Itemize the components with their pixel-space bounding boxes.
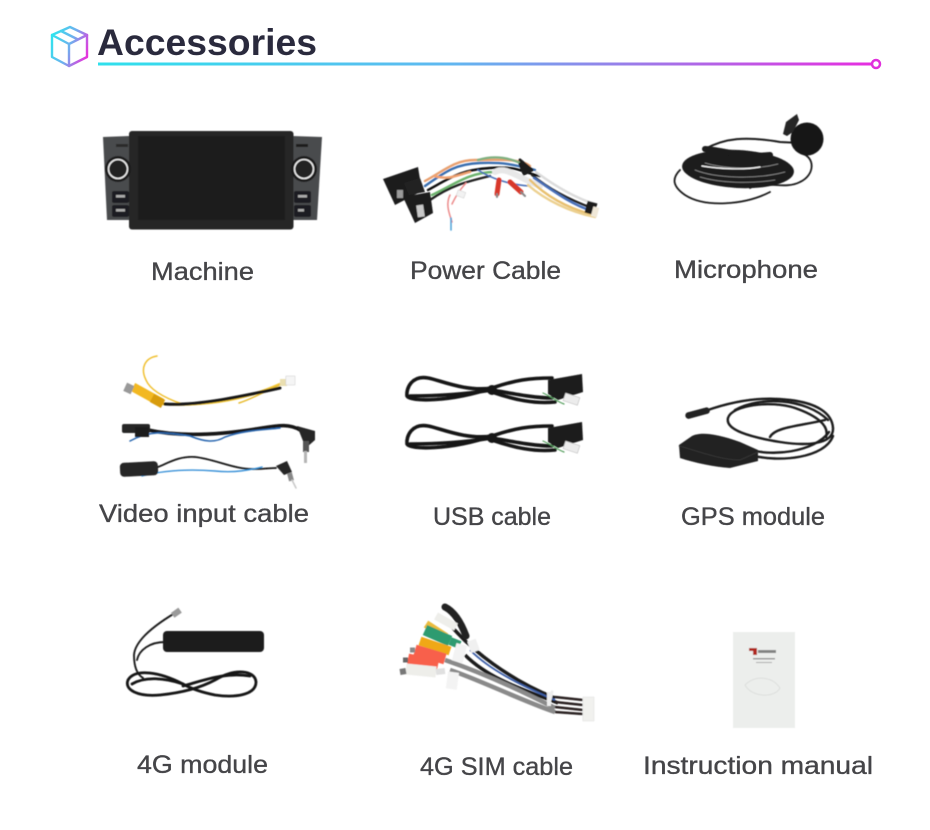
gps antenna photo bbox=[679, 399, 833, 468]
cables photo bbox=[120, 356, 315, 488]
label: 4G SIM cable: 4G SIM cable bbox=[420, 753, 573, 781]
item: 4g sim cable bbox=[400, 607, 594, 781]
item: gps module bbox=[679, 399, 833, 531]
4g antenna photo bbox=[127, 608, 264, 696]
manual booklet photo bbox=[733, 632, 795, 728]
icon: gradient cube bbox=[52, 27, 87, 66]
header gradient rule bbox=[98, 60, 880, 68]
label: GPS module: GPS module bbox=[681, 503, 825, 531]
label: Instruction manual: Instruction manual bbox=[643, 752, 873, 780]
label: Machine: Machine bbox=[151, 258, 254, 286]
head unit photo bbox=[103, 131, 322, 230]
lavalier microphone photo bbox=[675, 114, 824, 203]
two usb cables photo bbox=[407, 374, 583, 453]
rca harness photo bbox=[400, 607, 594, 721]
item: machine bbox=[103, 131, 322, 286]
header bbox=[52, 22, 880, 68]
label: 4G module: 4G module bbox=[137, 751, 268, 779]
item: power cable bbox=[383, 157, 599, 285]
item: 4g module bbox=[127, 608, 268, 779]
wiring harness photo bbox=[383, 157, 599, 230]
item: microphone bbox=[674, 114, 824, 284]
lower usb cable bbox=[407, 422, 583, 453]
title: Accessories bbox=[97, 22, 317, 63]
label: USB cable: USB cable bbox=[433, 503, 551, 531]
label: Microphone: Microphone bbox=[674, 256, 818, 284]
label: Video input cable: Video input cable bbox=[99, 500, 309, 528]
upper usb cable bbox=[407, 374, 583, 405]
item: instruction manual bbox=[643, 632, 873, 780]
item: usb cable bbox=[407, 374, 583, 531]
item: video input cable bbox=[99, 356, 315, 528]
label: Power Cable: Power Cable bbox=[410, 257, 561, 285]
